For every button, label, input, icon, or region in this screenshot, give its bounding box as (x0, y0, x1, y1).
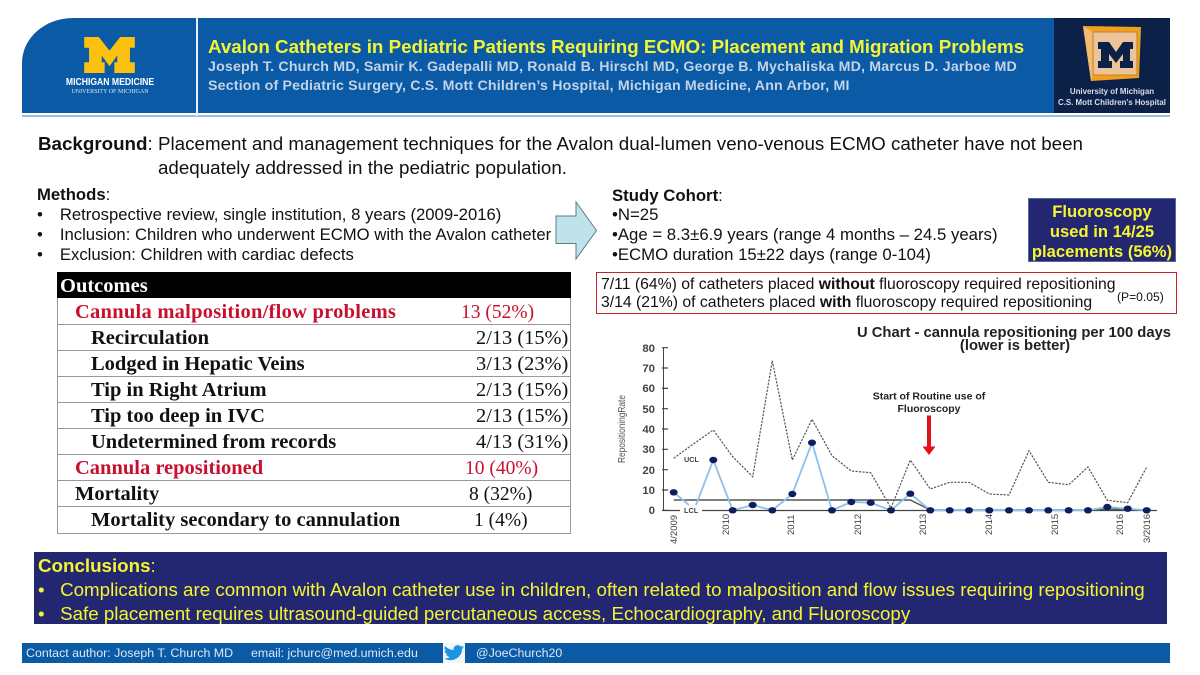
row: recirculation (57, 325, 571, 351)
U chart (617, 325, 1171, 544)
UCL line: UCL (684, 455, 700, 464)
y axis: 70 (642, 363, 655, 375)
LCL label: LCL (684, 506, 699, 515)
icon: twitter bird (443, 642, 465, 662)
y axis: 40 (642, 424, 655, 436)
row: repositioned: 10 (40%) (465, 458, 538, 479)
x axis: 2015 (1050, 514, 1061, 535)
annotation: start of fluoroscopy: Start of Routine use of (873, 390, 986, 402)
title: Avalon Catheters in Pediatric Patients Requiring ECMO: Placement and Migration Problems (208, 36, 1024, 57)
row: hepatic veins: Lodged in Hepatic Veins (91, 353, 305, 375)
row: mortality: Mortality (75, 483, 159, 505)
conclusions panel (34, 552, 1167, 624)
x axis: 2010 (721, 514, 732, 535)
row: repositioned: Cannula repositioned (75, 457, 263, 479)
methods: Methods: (37, 184, 110, 204)
affiliation: Section of Pediatric Surgery, C.S. Mott Children’s Hospital, Michigan Medicine, Ann Arbor, MI (208, 78, 850, 94)
row: IVC: Tip too deep in IVC (91, 405, 265, 427)
annotation: start of fluoroscopy (873, 390, 986, 455)
row: undetermined: 4/13 (31%) (476, 431, 568, 453)
row: cannula malposition: 13 (52%) (461, 302, 534, 323)
conclusions panel: • Safe placement requires ultrasound-guided percutaneous access, Echocardiography, and Fluoroscopy (38, 603, 910, 624)
chart title: (lower is better) (960, 338, 1070, 354)
contact author: Contact author: Joseph T. Church MD (26, 646, 233, 660)
y axis label: RepositioningRate (617, 395, 628, 463)
table header: Outcomes (60, 275, 148, 297)
row: mortality from cannulation: Mortality secondary to cannulation (91, 509, 400, 531)
arrow: fluoroscopy start (922, 416, 936, 455)
rate series (670, 440, 1151, 514)
y axis: 80 (642, 343, 655, 355)
x axis: 2012 (853, 514, 864, 535)
row: undetermined: Undetermined from records (91, 431, 336, 453)
comparison text (601, 276, 1115, 311)
y axis: 10 (642, 485, 655, 497)
row: mortality: 8 (32%) (469, 484, 532, 505)
chart title: U Chart - cannula repositioning per 100 days (857, 325, 1171, 341)
row: hepatic veins: 3/13 (23%) (476, 353, 568, 375)
row: IVC: 2/13 (15%) (476, 405, 568, 427)
UCL line (674, 361, 1147, 508)
logo caption: C.S. Mott Children's Hospital (1058, 98, 1166, 106)
twitter handle: @JoeChurch20 (476, 646, 562, 660)
conclusions panel: Conclusions: (38, 555, 156, 576)
y axis (642, 343, 668, 517)
email: email: jchurc@med.umich.edu (251, 646, 418, 660)
logo caption: University of Michigan (1070, 87, 1154, 96)
arrow: methods to cohort (556, 200, 597, 260)
row: mortality from cannulation (57, 507, 571, 534)
conclusions panel: • Complications are common with Avalon catheter use in children, often related to malposition and flow issues requiring repositioning (38, 579, 1145, 600)
study cohort: Study Cohort: (612, 186, 723, 204)
LCL label (680, 506, 702, 515)
logo wordmark: MICHIGAN MEDICINE (66, 77, 154, 88)
row: repositioned (57, 455, 571, 481)
callout: repositioning comparison (596, 272, 1177, 314)
p value: (P=0.05) (1117, 290, 1164, 304)
x axis: 2014 (984, 514, 995, 535)
row: cannula malposition (57, 299, 571, 325)
y axis: 0 (649, 505, 655, 517)
row: recirculation: 2/13 (15%) (476, 327, 568, 349)
row: right atrium: 2/13 (15%) (476, 379, 568, 401)
comparison text: 3/14 (21%) of catheters placed with fluoroscopy required repositioning (601, 294, 1092, 311)
icon: toy block (1083, 26, 1141, 81)
callout: fluoroscopy use: placements (56%) (1032, 242, 1172, 261)
methods: • Exclusion: Children with cardiac defects (37, 245, 354, 264)
row: right atrium (57, 377, 571, 403)
x axis: 4/2009 (669, 515, 680, 544)
x axis: 3/2016 (1142, 514, 1153, 543)
row: mortality from cannulation: 1 (4%) (474, 510, 528, 531)
x axis: 2016 (1115, 514, 1126, 535)
y axis: 20 (642, 465, 655, 477)
logo: Michigan Medicine (66, 37, 154, 95)
background statement: adequately addressed in the pediatric population. (158, 157, 567, 178)
background statement (38, 133, 1083, 178)
icon: block M (84, 37, 135, 73)
row: mortality (57, 481, 571, 507)
header banner (22, 18, 1170, 117)
center line (674, 500, 1147, 510)
footer bar (22, 642, 1170, 662)
row: hepatic veins (57, 351, 571, 377)
study cohort (612, 186, 998, 264)
callout: fluoroscopy use: Fluoroscopy (1052, 202, 1152, 221)
study cohort: •Age = 8.3±6.9 years (range 4 months – 24.5 years) (612, 225, 998, 244)
logo: C.S. Mott Children's Hospital (1054, 18, 1170, 113)
logo caption (1058, 87, 1166, 106)
y axis: 60 (642, 383, 655, 395)
comparison text: 7/11 (64%) of catheters placed without fluoroscopy required repositioning (601, 276, 1115, 292)
x axis (663, 510, 1157, 544)
background statement: Background: (38, 133, 153, 154)
outcomes table (57, 272, 571, 534)
authors: Joseph T. Church MD, Samir K. Gadepalli MD, Ronald B. Hirschl MD, George B. Mychaliska MD, Marcus D. Jarboe MD (208, 59, 1017, 75)
row: IVC (57, 403, 571, 429)
methods: • Retrospective review, single institution, 8 years (2009-2016) (37, 205, 501, 224)
chart title (857, 325, 1171, 354)
row: cannula malposition: Cannula malposition/flow problems (75, 301, 396, 323)
x axis: 2011 (786, 515, 797, 535)
background statement: Placement and management techniques for the Avalon dual-lumen veno-venous ECMO catheter have not been (158, 133, 1083, 154)
row: right atrium: Tip in Right Atrium (91, 379, 267, 401)
row: recirculation: Recirculation (91, 327, 209, 349)
study cohort: •ECMO duration 15±22 days (range 0-104) (612, 245, 931, 264)
annotation: start of fluoroscopy: Fluoroscopy (897, 403, 961, 415)
y axis: 50 (642, 404, 655, 416)
row: undetermined (57, 429, 571, 455)
callout: fluoroscopy use (1028, 198, 1176, 262)
logo sub-line: UNIVERSITY OF MICHIGAN (71, 89, 149, 95)
y axis: 30 (642, 444, 655, 456)
methods: • Inclusion: Children who underwent ECMO with the Avalon catheter (37, 225, 551, 244)
callout: fluoroscopy use: used in 14/25 (1050, 222, 1154, 241)
table header (57, 272, 571, 298)
study cohort: •N=25 (612, 205, 658, 224)
methods (37, 184, 551, 264)
x axis: 2013 (918, 514, 929, 535)
